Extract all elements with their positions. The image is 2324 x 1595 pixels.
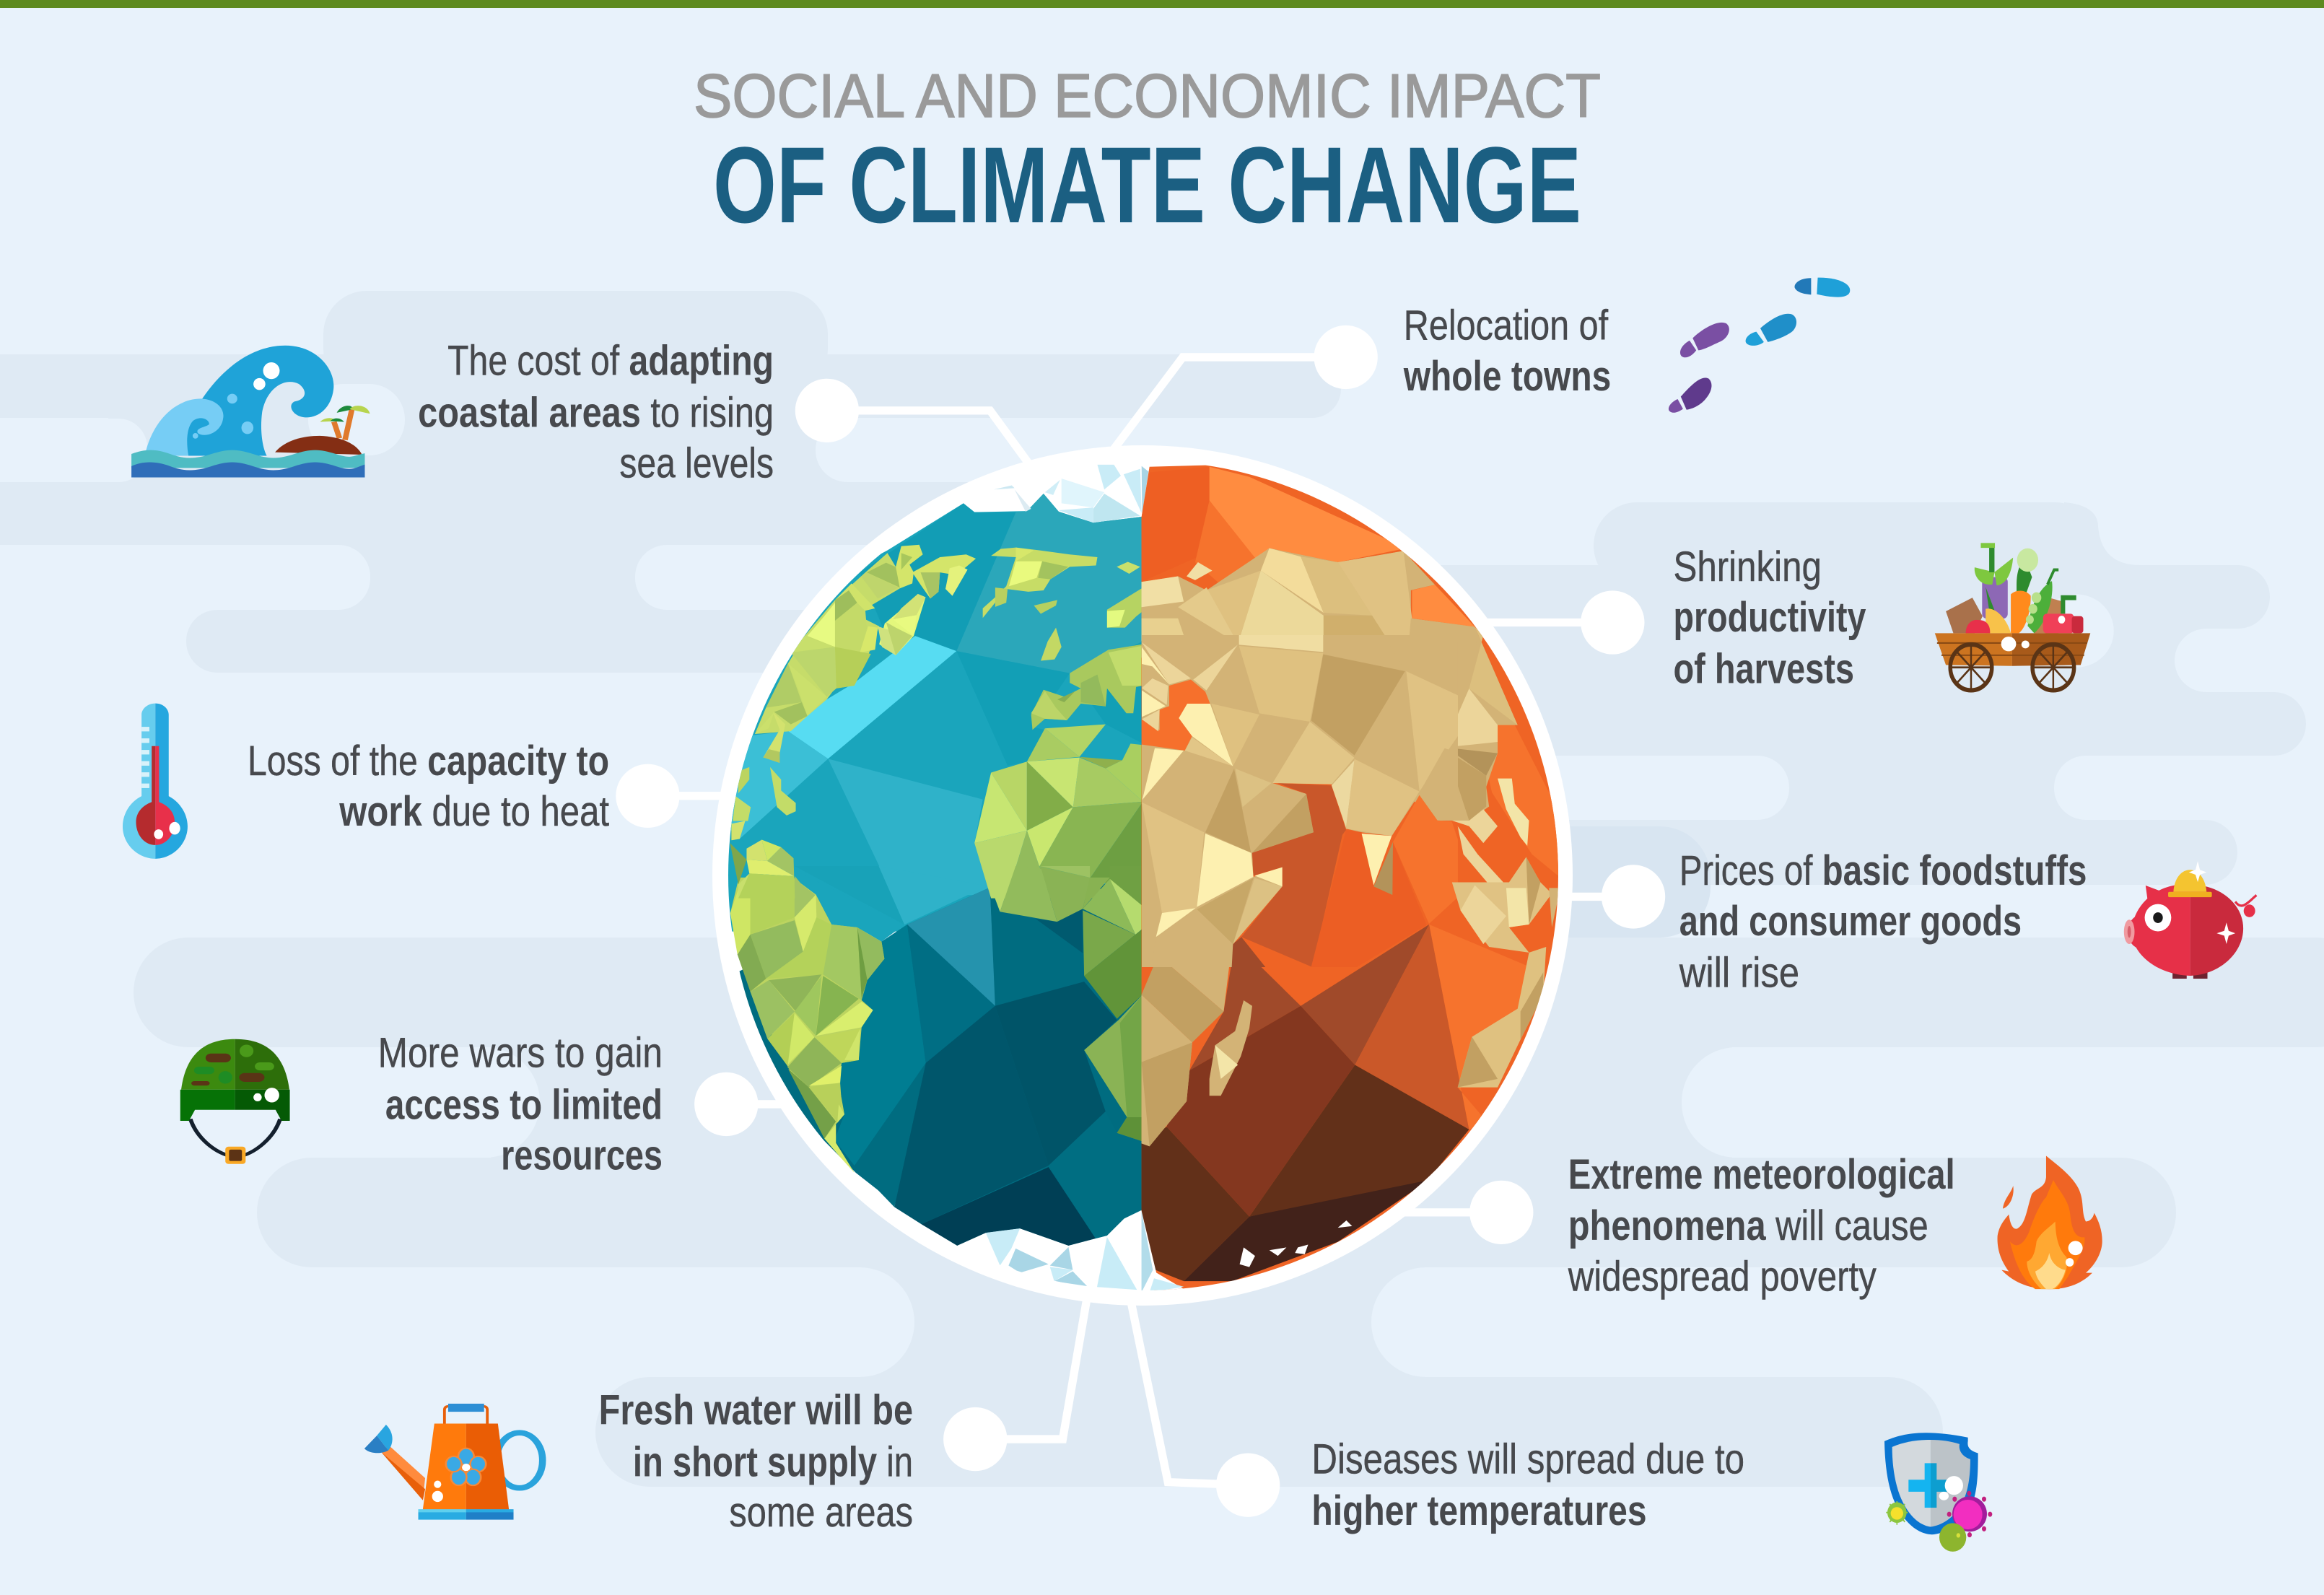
text: coastal adaptation: The cost of adapting xyxy=(447,338,774,385)
northern ocean and ice xyxy=(722,465,1148,932)
South America northern tip xyxy=(730,840,813,899)
text: harvests: Shrinking xyxy=(1674,543,1822,590)
text: extreme weather: Extreme meteorological xyxy=(1568,1151,1955,1198)
icon: vegetable cart xyxy=(1935,543,2114,691)
icon: helmet xyxy=(180,1039,290,1164)
text: prices xyxy=(1679,847,2087,997)
text: prices: and consumer goods xyxy=(1679,898,2022,945)
text: coastal adaptation: sea levels xyxy=(619,440,774,486)
icon: footprints xyxy=(1669,278,1850,413)
globe xyxy=(712,445,1583,1306)
text: diseases: Diseases will spread due to xyxy=(1311,1436,1744,1482)
text: wars: resources xyxy=(501,1132,663,1179)
text: fresh water xyxy=(599,1387,913,1536)
text: diseases xyxy=(1311,1436,1744,1534)
text: prices: Prices of basic foodstuffs xyxy=(1679,847,2087,894)
title: SOCIAL AND ECONOMIC IMPACT xyxy=(694,62,1601,131)
Middle East, central Asia and North Africa xyxy=(1142,635,1458,967)
icon: shield and viruses xyxy=(1884,1433,1992,1552)
southern ocean and ice xyxy=(722,866,1142,1290)
text: relocation: whole towns xyxy=(1403,353,1611,400)
text: wars: More wars to gain xyxy=(378,1030,663,1077)
text: capacity to work xyxy=(248,738,609,835)
icon: wave and island xyxy=(131,346,370,478)
text: wars: access to limited xyxy=(385,1081,663,1128)
icon: fire xyxy=(1998,1156,2102,1289)
connectors and dots xyxy=(616,325,1665,1517)
icon: piggy bank xyxy=(2124,861,2256,979)
text: relocation xyxy=(1403,302,1611,400)
top bar xyxy=(0,0,2324,8)
icon: thermometer xyxy=(123,704,188,859)
icon: watering can xyxy=(364,1404,543,1520)
text: harvests xyxy=(1674,543,1866,693)
text: wars xyxy=(378,1030,663,1179)
text: extreme weather xyxy=(1568,1151,1955,1301)
North America, Greenland, Europe, North Africa xyxy=(731,545,1143,899)
text: fresh water: in short supply in xyxy=(633,1438,913,1485)
text: harvests: productivity xyxy=(1674,594,1866,641)
text: capacity to work: work due to heat xyxy=(338,788,609,835)
warm hemisphere xyxy=(1142,455,1583,1298)
text: coastal adaptation xyxy=(418,338,774,486)
Eurasia north and east xyxy=(1142,549,1518,1146)
text: coastal adaptation: coastal areas to rising xyxy=(418,389,774,436)
Madagascar, Japan, Indonesia, Australia xyxy=(1210,779,1560,1096)
text: harvests: of harvests xyxy=(1674,646,1854,693)
text: relocation: Relocation of xyxy=(1404,302,1609,349)
text: prices: will rise xyxy=(1679,950,1799,997)
text: fresh water: Fresh water will be xyxy=(599,1387,913,1434)
text: capacity to work: Loss of the capacity to xyxy=(248,738,609,785)
text: diseases: higher temperatures xyxy=(1311,1487,1647,1534)
title xyxy=(694,62,1601,245)
South America and southern Africa xyxy=(730,866,1161,1173)
text: fresh water: some areas xyxy=(729,1489,913,1536)
title: OF CLIMATE CHANGE xyxy=(713,124,1581,245)
text: extreme weather: phenomena will cause xyxy=(1568,1202,1928,1249)
text: extreme weather: widespread poverty xyxy=(1568,1254,1877,1301)
